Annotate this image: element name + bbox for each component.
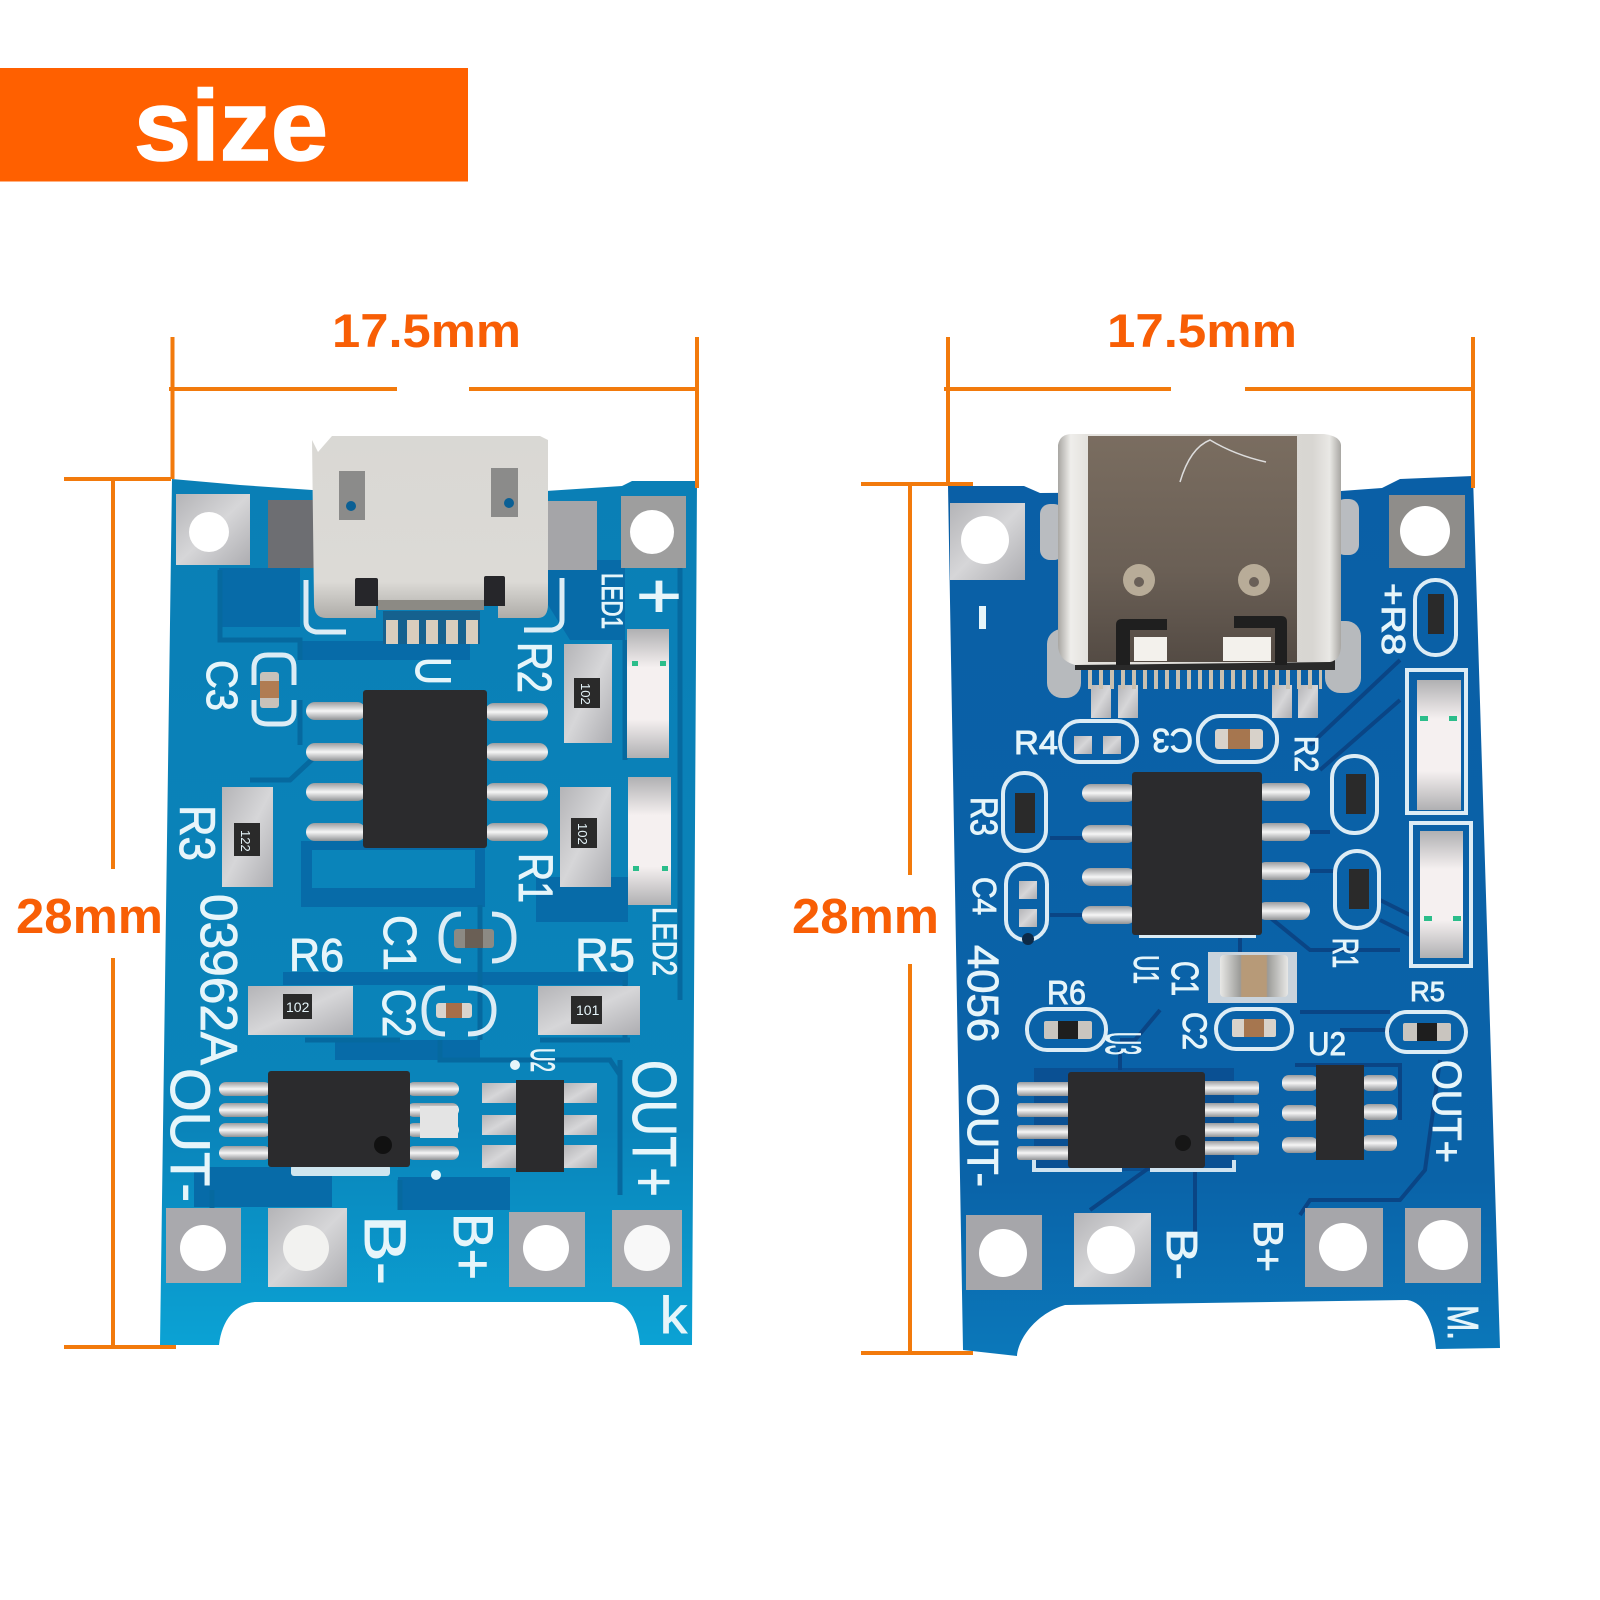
PCB outline right [948,476,1500,1356]
silkscreen labels left: + [636,562,682,631]
silkscreen labels right: C3 [1152,722,1193,759]
silkscreen labels right: +R8 [1375,583,1412,655]
silkscreen labels left: R1 [508,853,561,903]
silkscreen labels right: C2 [1175,1012,1213,1050]
silkscreen labels left: k [660,1287,688,1345]
silkscreen labels right: C1 [1163,961,1205,996]
silkscreen labels right: R1 [1325,938,1366,968]
silkscreen labels right: M. [1438,1305,1487,1340]
silkscreen labels left: R2 [507,642,560,693]
silkscreen labels right: U2 [1308,1026,1346,1062]
resistors left [222,644,640,1035]
silkscreen labels right: B+ [1245,1220,1292,1272]
silkscreen labels right: R6 [1047,974,1086,1011]
micro USB connector [306,436,562,644]
silkscreen labels left: LED2 [645,907,683,976]
silkscreen labels right: 4056 [958,945,1007,1042]
USB-C connector [1040,434,1361,718]
resistors left: 102 [578,683,593,705]
right board: USB-C module [948,434,1500,1356]
silkscreen labels right: B- [1157,1228,1206,1280]
silkscreen labels left: C2 [373,989,425,1037]
dimension: left width 17.5mm: 17.5mm [332,304,521,357]
silkscreen labels left: OUT- [159,1068,222,1202]
dimension: left height 28mm: 28mm [16,890,163,944]
U3 protection IC right [1017,1068,1259,1171]
U3 protection IC left [219,1071,459,1176]
resistors left: 122 [238,830,253,852]
silkscreen labels left: OUT+ [619,1060,688,1197]
connector pads and holes left [166,494,686,1287]
silkscreen labels left: C3 [197,660,246,711]
silkscreen labels left: LED1 [595,573,628,629]
silkscreen labels left: B- [352,1215,417,1285]
capacitors left [254,655,514,1034]
PCB outline left [160,479,697,1345]
silkscreen labels right: U3 [1095,1032,1151,1055]
silkscreen labels right: R2 [1288,736,1325,772]
dimension: left width 17.5mm [169,304,697,488]
U2 MOSFET left [431,1060,597,1180]
component pills right [1003,580,1466,1052]
copper traces right [1050,660,1440,1250]
silkscreen labels left: R6 [289,929,344,981]
dimension: right height 28mm: 28mm [792,890,939,944]
U1 charger IC left [306,690,548,848]
dimension: left height 28mm [16,479,176,1347]
left board: micro USB module [159,436,697,1345]
dimension: right width 17.5mm [944,304,1473,488]
silkscreen labels right: OUT- [958,1083,1007,1187]
silkscreen labels right: U1 [1126,955,1165,984]
dimension: right height 28mm [792,484,973,1353]
LEDs left [627,629,671,905]
title banner [0,68,468,182]
title banner: size [134,70,328,182]
resistors left: 101 [576,1002,600,1018]
resistors left: 102 [575,823,590,845]
U2 MOSFET right [1282,1065,1397,1160]
silkscreen labels right [958,583,1487,1340]
C1 large capacitor right [1208,952,1297,1003]
silkscreen labels left: U [405,657,461,685]
silkscreen labels left: U2 [523,1048,561,1072]
silkscreen labels right: OUT+ [1424,1060,1470,1163]
silkscreen labels left [159,562,688,1345]
copper planes and traces left [194,560,680,1210]
connector pads and holes right [950,495,1481,1290]
silkscreen labels right: R3 [962,797,1004,836]
LEDs right [1407,670,1471,966]
silkscreen labels left: R3 [169,805,225,861]
silkscreen labels left: 03962A [189,894,247,1065]
silkscreen labels left: B+ [442,1213,505,1280]
silkscreen labels left: R5 [575,929,635,981]
U1 charger IC right [1082,772,1310,938]
resistors left: 102 [286,999,310,1015]
silkscreen labels right: C4 [966,877,1003,915]
silkscreen labels right: R4 [1014,724,1058,761]
silkscreen labels left: C1 [374,915,426,971]
silkscreen labels right: R5 [1410,976,1445,1007]
dimension: right width 17.5mm: 17.5mm [1107,304,1297,357]
